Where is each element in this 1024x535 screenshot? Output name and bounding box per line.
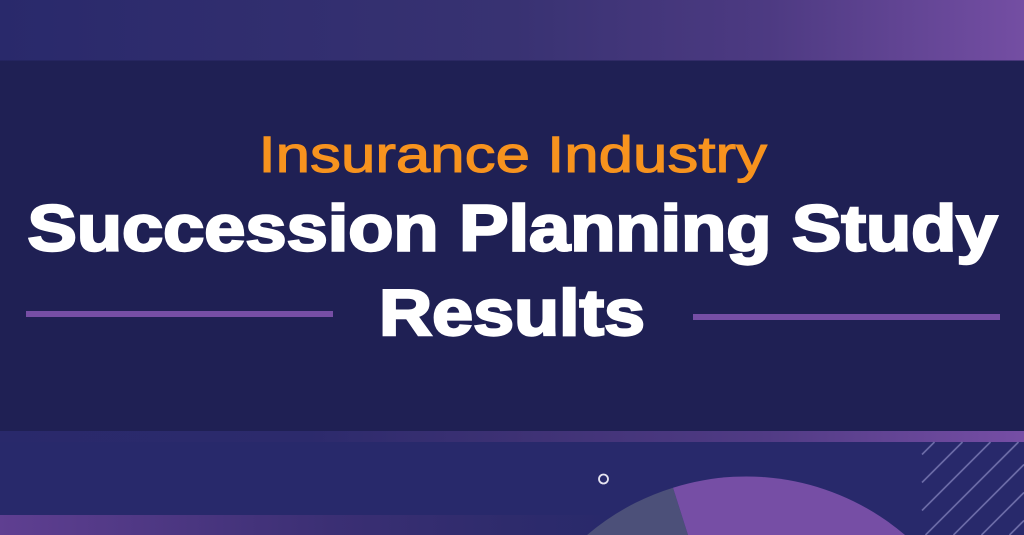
pie slice: purple (673, 476, 905, 535)
diagonal stripes decoration (922, 442, 1024, 535)
lower gradient band (0, 431, 1024, 442)
left purple rule (26, 311, 333, 317)
pie chart (587, 476, 905, 535)
small ring marker (599, 474, 608, 484)
subtitle: Insurance Industry: Insurance Industry (258, 126, 768, 183)
title panel (0, 60, 1024, 431)
heading line: Succession Planning Study: Succession Planning Study (28, 192, 998, 264)
top gradient band (0, 0, 1024, 60)
heading line: Results: Results (379, 276, 645, 349)
right purple rule (693, 314, 1000, 320)
bottom left gradient band (0, 515, 600, 535)
pie slice: grey (587, 488, 688, 535)
